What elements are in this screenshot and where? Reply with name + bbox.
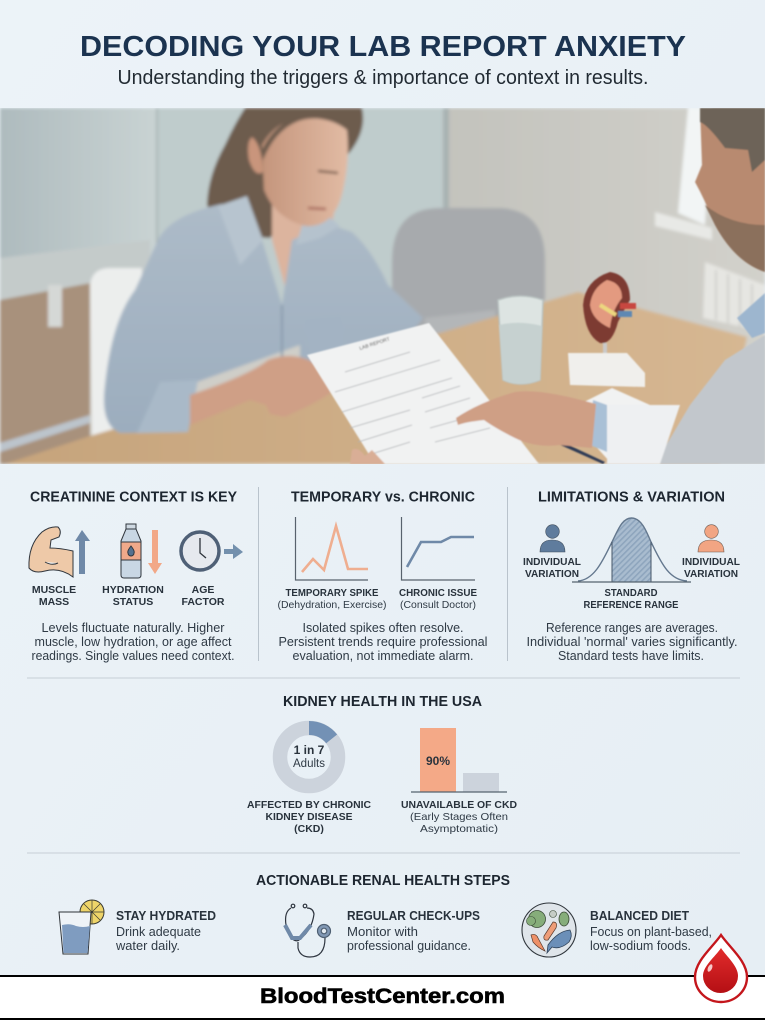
icon: blood drop logo (695, 935, 747, 1002)
text: regular check-ups (347, 909, 480, 953)
drinking glass (498, 296, 543, 384)
panel: temporary vs chronic (278, 490, 488, 663)
woman face (262, 118, 348, 226)
heading: TEMPORARY vs. CHRONIC (291, 490, 476, 506)
text: regular check-ups: Monitor with (347, 925, 418, 939)
label: individual variation left: VARIATION (525, 568, 579, 580)
header (80, 31, 686, 89)
icon: person left (540, 525, 565, 552)
icon: water bottle (121, 524, 141, 578)
label: temporary spike: TEMPORARY SPIKE (286, 587, 378, 599)
lab report paper (307, 323, 539, 464)
heading: KIDNEY HEALTH IN THE USA (283, 694, 483, 710)
clipboard (560, 444, 606, 464)
label: individual variation left: INDIVIDUAL (523, 556, 582, 568)
description (278, 620, 488, 663)
label: individual variation right: VARIATION (684, 568, 738, 580)
label: muscle mass: MASS (39, 596, 69, 608)
icon: glass with lemon (59, 900, 104, 954)
text: regular check-ups: professional guidance. (347, 939, 471, 953)
icon: plate of healthy food (522, 903, 576, 957)
photo: patient and doctor reviewing lab report (0, 108, 765, 464)
icon: clock (181, 532, 219, 570)
text: regular check-ups: REGULAR CHECK-UPS (347, 909, 480, 923)
description (526, 620, 738, 663)
paper heading: LAB REPORT (359, 336, 391, 352)
icon: stethoscope (285, 904, 330, 957)
icon: flexed arm (29, 527, 73, 577)
description: muscle, low hydration, or age affect (34, 634, 232, 649)
heading: CREATININE CONTEXT IS KEY (30, 490, 237, 506)
label: muscle mass: MUSCLE (32, 584, 76, 596)
description: Reference ranges are averages. (546, 620, 718, 635)
text: balanced diet: low-sodium foods. (590, 939, 691, 953)
chart: donut 1 in 7 (280, 721, 338, 786)
label: unavailable of CKD: UNAVAILABLE OF CKD (401, 799, 517, 811)
panel: limitations and variation (523, 490, 741, 663)
label: age factor: FACTOR (182, 596, 225, 608)
heading: ACTIONABLE RENAL HEALTH STEPS (256, 873, 510, 889)
label: individual variation right: INDIVIDUAL (682, 556, 741, 568)
label: age factor: AGE (192, 584, 214, 596)
kidney model (568, 272, 645, 387)
label: affected by CKD: AFFECTED BY CHRONIC (247, 799, 371, 811)
arrow: up (75, 530, 90, 574)
label: temporary spike: (Dehydration, Exercise) (278, 599, 386, 611)
label: chronic issue (399, 587, 477, 611)
icon: person right (698, 525, 724, 552)
footer bar (0, 975, 765, 1024)
chart: temporary spike (296, 517, 368, 580)
description: readings. Single values need context. (32, 648, 234, 663)
label: unavailable of CKD (401, 799, 517, 835)
text: balanced diet: Focus on plant-based, (590, 925, 712, 939)
description: Individual 'normal' varies significantly. (526, 634, 738, 649)
chart: 90 percent bars: 90% (426, 754, 450, 768)
subtitle: Understanding the triggers & importance of context in results. (118, 66, 648, 89)
chart: chronic issue (402, 517, 475, 580)
arrow: right (224, 544, 243, 559)
text: balanced diet: BALANCED DIET (590, 909, 689, 923)
label: chronic issue: (Consult Doctor) (400, 599, 476, 611)
arrow: down (148, 530, 162, 574)
label: hydration status: STATUS (113, 596, 153, 608)
text: stay hydrated: water daily. (115, 939, 180, 953)
label: unavailable of CKD: Asymptomatic) (420, 823, 498, 835)
text: stay hydrated: STAY HYDRATED (116, 909, 216, 923)
panel: actionable renal health steps (59, 873, 712, 957)
title: DECODING YOUR LAB REPORT ANXIETY (80, 31, 686, 63)
label: temporary spike (278, 587, 386, 611)
description: Isolated spikes often resolve. (302, 620, 464, 635)
chart: donut 1 in 7: Adults (293, 758, 325, 770)
description: Levels fluctuate naturally. Higher (42, 620, 225, 635)
label: affected by CKD: KIDNEY DISEASE (266, 811, 352, 823)
text: stay hydrated: Drink adequate (116, 925, 201, 939)
panel: creatinine context (29, 490, 243, 663)
text: balanced diet (590, 909, 712, 953)
chart: bell curve (572, 518, 691, 582)
description: evaluation, not immediate alarm. (292, 648, 474, 663)
label: standard reference range: STANDARD (604, 587, 658, 599)
description: Persistent trends require professional (278, 634, 488, 649)
footer website: BloodTestCenter.com (260, 985, 505, 1008)
description (32, 620, 234, 663)
description: Standard tests have limits. (558, 648, 704, 663)
woman hair (207, 108, 363, 238)
label: unavailable of CKD: (Early Stages Often (410, 811, 508, 823)
panel: kidney health in the USA (247, 694, 517, 835)
chart: 90 percent bars (411, 728, 507, 792)
text: stay hydrated (115, 909, 216, 953)
label: affected by CKD: (CKD) (294, 823, 324, 835)
heading: LIMITATIONS & VARIATION (538, 490, 725, 506)
label: standard reference range: REFERENCE RANGE (584, 599, 678, 611)
label: chronic issue: CHRONIC ISSUE (399, 587, 477, 599)
chart: donut 1 in 7: 1 in 7 (294, 743, 325, 757)
label: hydration status: HYDRATION (102, 584, 164, 596)
